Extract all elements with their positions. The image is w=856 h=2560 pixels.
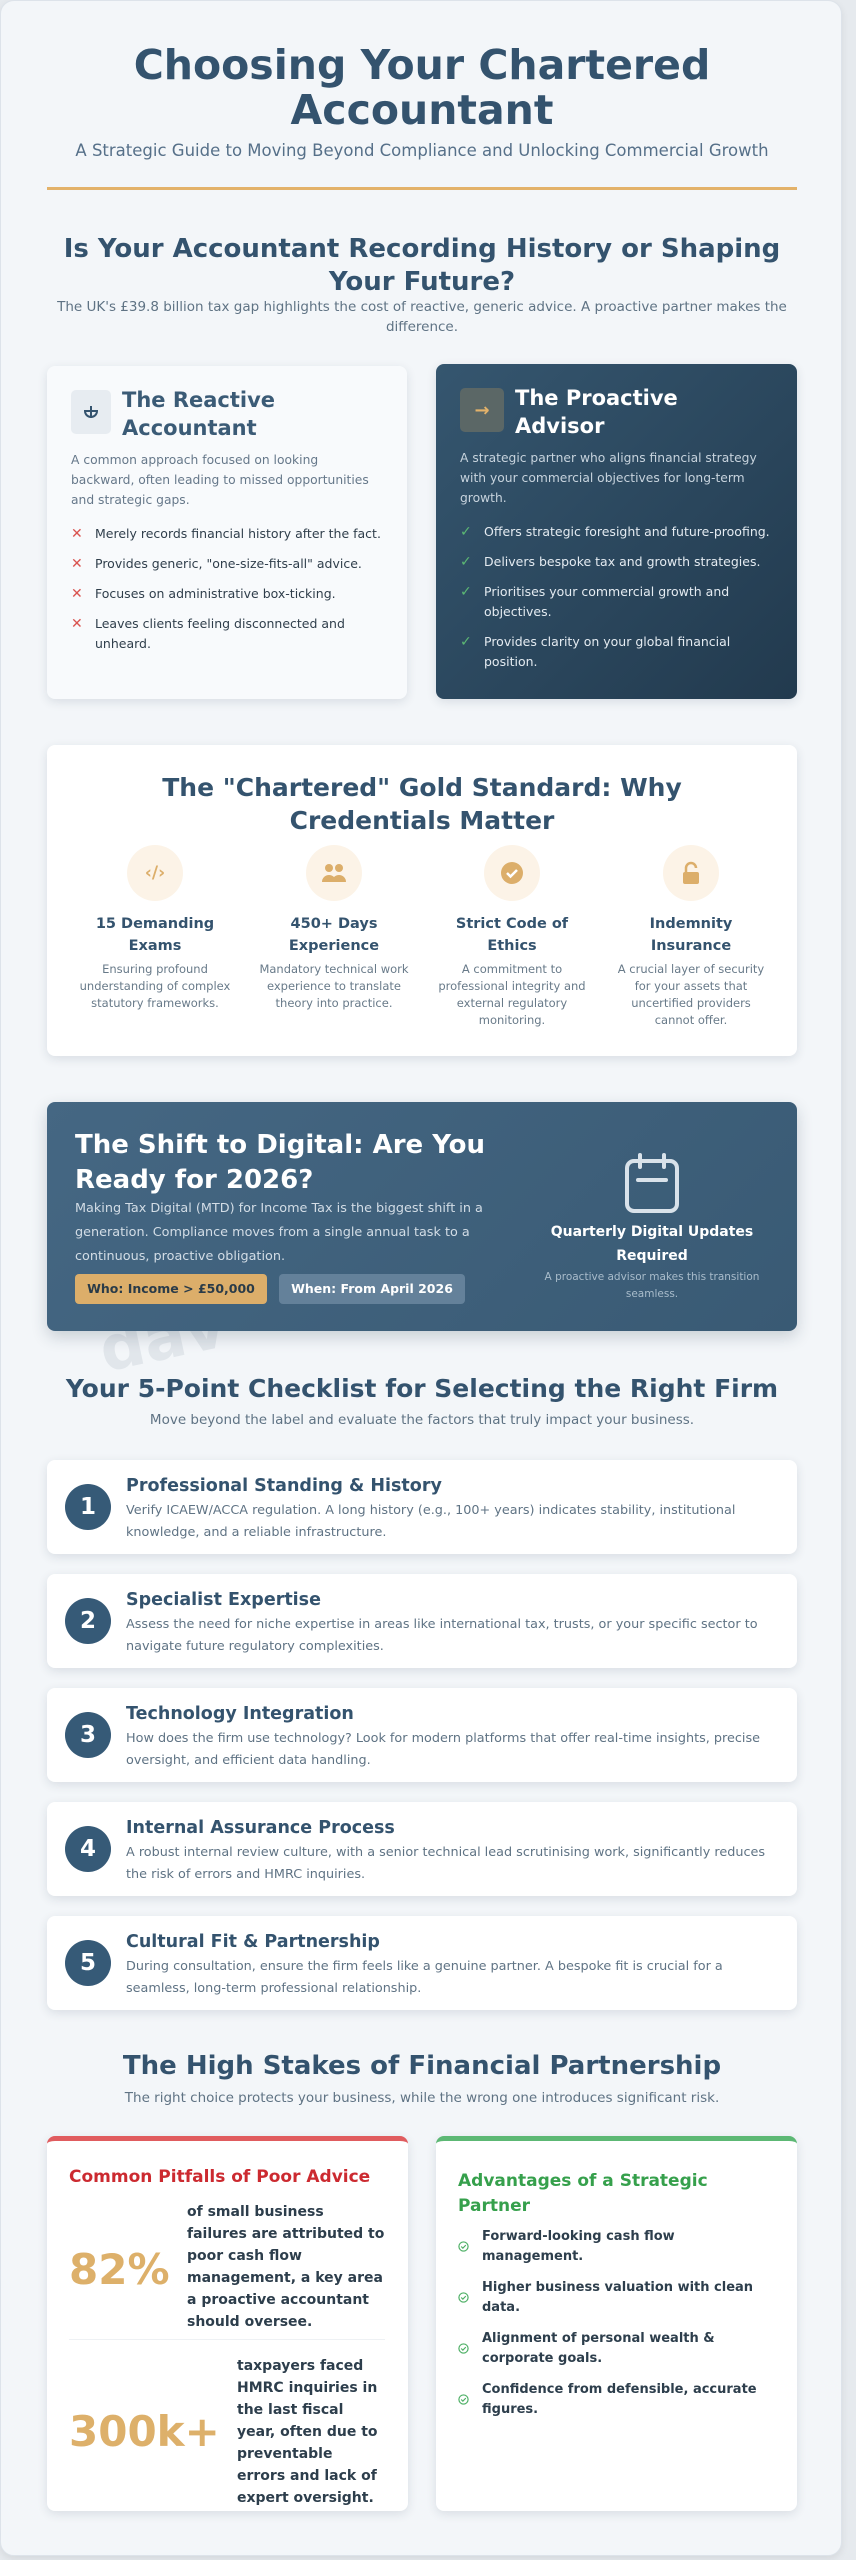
panel: chartered gold standard — [47, 745, 797, 1056]
icon: arrow: → — [474, 400, 490, 420]
badge: when — [279, 1274, 465, 1304]
checklist item 2 — [47, 1574, 797, 1668]
credential: insurance: Indemnity — [650, 916, 732, 932]
panel: shift to digital — [47, 1102, 797, 1331]
heading: Advisor — [515, 414, 604, 438]
list: ✕ — [71, 526, 83, 542]
credential: ethics — [438, 845, 586, 1027]
callout: quarterly updates: A proactive advisor makes this transition seamless. — [545, 1271, 759, 1300]
callout: quarterly updates — [544, 1224, 759, 1300]
checklist item 3 — [47, 1688, 797, 1782]
list: Provides generic, "one-size-fits-all" advice. — [95, 556, 362, 571]
checklist item 3: 3 — [80, 1722, 96, 1748]
checklist item 2: 2 — [80, 1608, 96, 1634]
heading: The Proactive — [515, 386, 678, 410]
stat: 82%: of small business failures are attributed to poor cash flow management, a key area a proactive accountant should oversee. — [187, 2204, 384, 2330]
credential: experience: Mandatory technical work experience to translate theory into practice. — [259, 962, 409, 1010]
credential: exams: Exams — [129, 938, 181, 954]
heading — [458, 2171, 708, 2216]
checklist item 4 — [47, 1802, 797, 1896]
credential: experience: 450+ Days — [291, 916, 377, 932]
description: A common approach focused on looking backward, often leading to missed opportunities and strategic gaps. — [71, 453, 369, 507]
list: Higher business valuation with clean data. — [482, 2280, 753, 2315]
list: ✓ — [460, 634, 472, 650]
list — [460, 524, 770, 669]
credential: insurance: Insurance — [651, 938, 731, 954]
heading — [75, 1130, 485, 1195]
stat: 300k+ — [69, 2358, 378, 2506]
heading: Ready for 2026? — [75, 1165, 313, 1195]
credential: exams: ‹/› — [145, 863, 165, 883]
panel: common pitfalls — [47, 2136, 408, 2511]
title: Accountant — [291, 86, 553, 134]
credential: experience — [259, 845, 409, 1010]
credential: insurance — [618, 845, 764, 1027]
heading: Partner — [458, 2196, 530, 2216]
checklist item 4: 4 — [80, 1836, 96, 1862]
heading — [122, 388, 275, 440]
credential: ethics: A commitment to professional integrity and external regulatory monitoring. — [438, 962, 586, 1027]
list: ✓ — [460, 584, 472, 600]
checklist item 4: Internal Assurance Process — [126, 1818, 395, 1838]
list: Delivers bespoke tax and growth strategies. — [484, 554, 760, 569]
credential: experience: Experience — [289, 938, 379, 954]
list: Prioritises your commercial growth and objectives. — [484, 584, 729, 619]
list: ✓ — [460, 524, 472, 540]
checklist item 5: 5 — [80, 1950, 96, 1976]
description: A strategic partner who aligns financial strategy with your commercial objectives for long-term growth. — [460, 451, 757, 505]
title — [134, 41, 710, 134]
title: Choosing Your Chartered — [134, 41, 710, 89]
list: Forward-looking cash flow management. — [482, 2229, 675, 2264]
stat: 82% — [69, 2204, 384, 2330]
checklist item 1: Professional Standing & History — [126, 1476, 442, 1496]
stat: 300k+: taxpayers faced HMRC inquiries in the last fiscal year, often due to preventable errors and lack of expert oversight. — [237, 2358, 378, 2506]
heading — [162, 773, 682, 835]
description: Making Tax Digital (MTD) for Income Tax is the biggest shift in a generation. Compliance moves from a single annual task to a continuous, proactive obligation. — [75, 1201, 483, 1264]
stat: 300k+: 300k+ — [69, 2407, 220, 2456]
badge: who: Who: Income > £50,000 — [87, 1281, 255, 1296]
panel: strategic advantages — [436, 2136, 797, 2511]
heading: checklist: Your 5-Point Checklist for Selecting the Right Firm — [66, 1374, 778, 1403]
credential: exams: Ensuring profound understanding of complex statutory frameworks. — [80, 962, 230, 1010]
checklist item 5: Cultural Fit & Partnership — [126, 1932, 380, 1952]
list — [71, 526, 381, 651]
list: ✕ — [71, 616, 83, 632]
checklist item 4: A robust internal review culture, with a senior technical lead scrutinising work, significantly reduces the risk of errors and HMRC inquiries. — [126, 1845, 765, 1882]
checklist item 3: How does the firm use technology? Look for modern platforms that offer real-time insights, precise oversight, and efficient data handling. — [126, 1731, 760, 1768]
heading: recording history: Is Your Accountant Recording History or Shaping — [64, 234, 780, 264]
panel: reactive accountant — [47, 366, 407, 699]
checklist item 1 — [47, 1460, 797, 1554]
callout: quarterly updates: Quarterly Digital Updates — [551, 1224, 753, 1240]
watermark: dav — [93, 1289, 232, 1386]
list: Confidence from defensible, accurate figures. — [482, 2382, 757, 2417]
heading: Advantages of a Strategic — [458, 2171, 708, 2191]
callout: quarterly updates: Required — [616, 1248, 688, 1264]
list: ✓ — [460, 554, 472, 570]
checklist item 3: Technology Integration — [126, 1704, 354, 1724]
checklist item 1: 1 — [80, 1494, 96, 1520]
list: Leaves clients feeling disconnected and unheard. — [95, 616, 345, 651]
credential: ethics: Ethics — [487, 938, 537, 954]
checklist item 2: Assess the need for niche expertise in areas like international tax, trusts, or your specific sector to navigate future regulatory complexities. — [126, 1617, 758, 1654]
badge: who — [75, 1274, 267, 1304]
heading: Accountant — [122, 416, 257, 440]
icon: scale — [71, 390, 111, 434]
heading: The Reactive — [122, 388, 275, 412]
heading: The "Chartered" Gold Standard: Why — [162, 773, 682, 802]
badge: when: When: From April 2026 — [291, 1281, 453, 1296]
checklist item 5 — [47, 1916, 797, 2010]
panel: proactive advisor — [436, 364, 797, 699]
credential: insurance: A crucial layer of security for your assets that uncertified providers cannot offer. — [618, 962, 764, 1027]
list: Provides clarity on your global financial position. — [484, 634, 730, 669]
heading: Common Pitfalls of Poor Advice — [69, 2167, 370, 2187]
checklist item 2: Specialist Expertise — [126, 1590, 321, 1610]
heading: Credentials Matter — [290, 806, 554, 835]
heading: recording history — [64, 234, 780, 297]
heading — [515, 386, 678, 438]
credential: ethics: Strict Code of — [456, 916, 568, 932]
icon: arrow — [460, 388, 504, 432]
subtitle: checklist: Move beyond the label and evaluate the factors that truly impact your business. — [150, 1412, 694, 1428]
heading: The Shift to Digital: Are You — [75, 1130, 485, 1160]
stat: 82%: 82% — [69, 2245, 170, 2294]
list: ✕ — [71, 556, 83, 572]
list: Alignment of personal wealth & corporate goals. — [482, 2331, 715, 2366]
credential: exams — [80, 845, 230, 1010]
list: Focuses on administrative box-ticking. — [95, 586, 336, 601]
heading: high stakes: The High Stakes of Financial Partnership — [123, 2051, 721, 2081]
checklist item 5: During consultation, ensure the firm feels like a genuine partner. A bespoke fit is crucial for a seamless, long-term professional relationship. — [126, 1959, 723, 1996]
list: Merely records financial history after the fact. — [95, 526, 381, 541]
checklist item 1: Verify ICAEW/ACCA regulation. A long history (e.g., 100+ years) indicates stability, institutional knowledge, and a reliable infrastructure. — [126, 1503, 735, 1540]
subtitle: A Strategic Guide to Moving Beyond Compliance and Unlocking Commercial Growth — [75, 141, 769, 160]
list: ✕ — [71, 586, 83, 602]
heading: recording history: Your Future? — [329, 267, 515, 297]
subtitle: high stakes: The right choice protects your business, while the wrong one introduces significant risk. — [125, 2090, 719, 2106]
icon: calendar — [625, 1153, 679, 1213]
list — [458, 2229, 757, 2417]
credential: exams: 15 Demanding — [96, 916, 214, 932]
intro text: The UK's £39.8 billion tax gap highlights the cost of reactive, generic advice. A proactive partner makes the difference. — [57, 299, 787, 335]
list: Offers strategic foresight and future-proofing. — [484, 524, 770, 539]
